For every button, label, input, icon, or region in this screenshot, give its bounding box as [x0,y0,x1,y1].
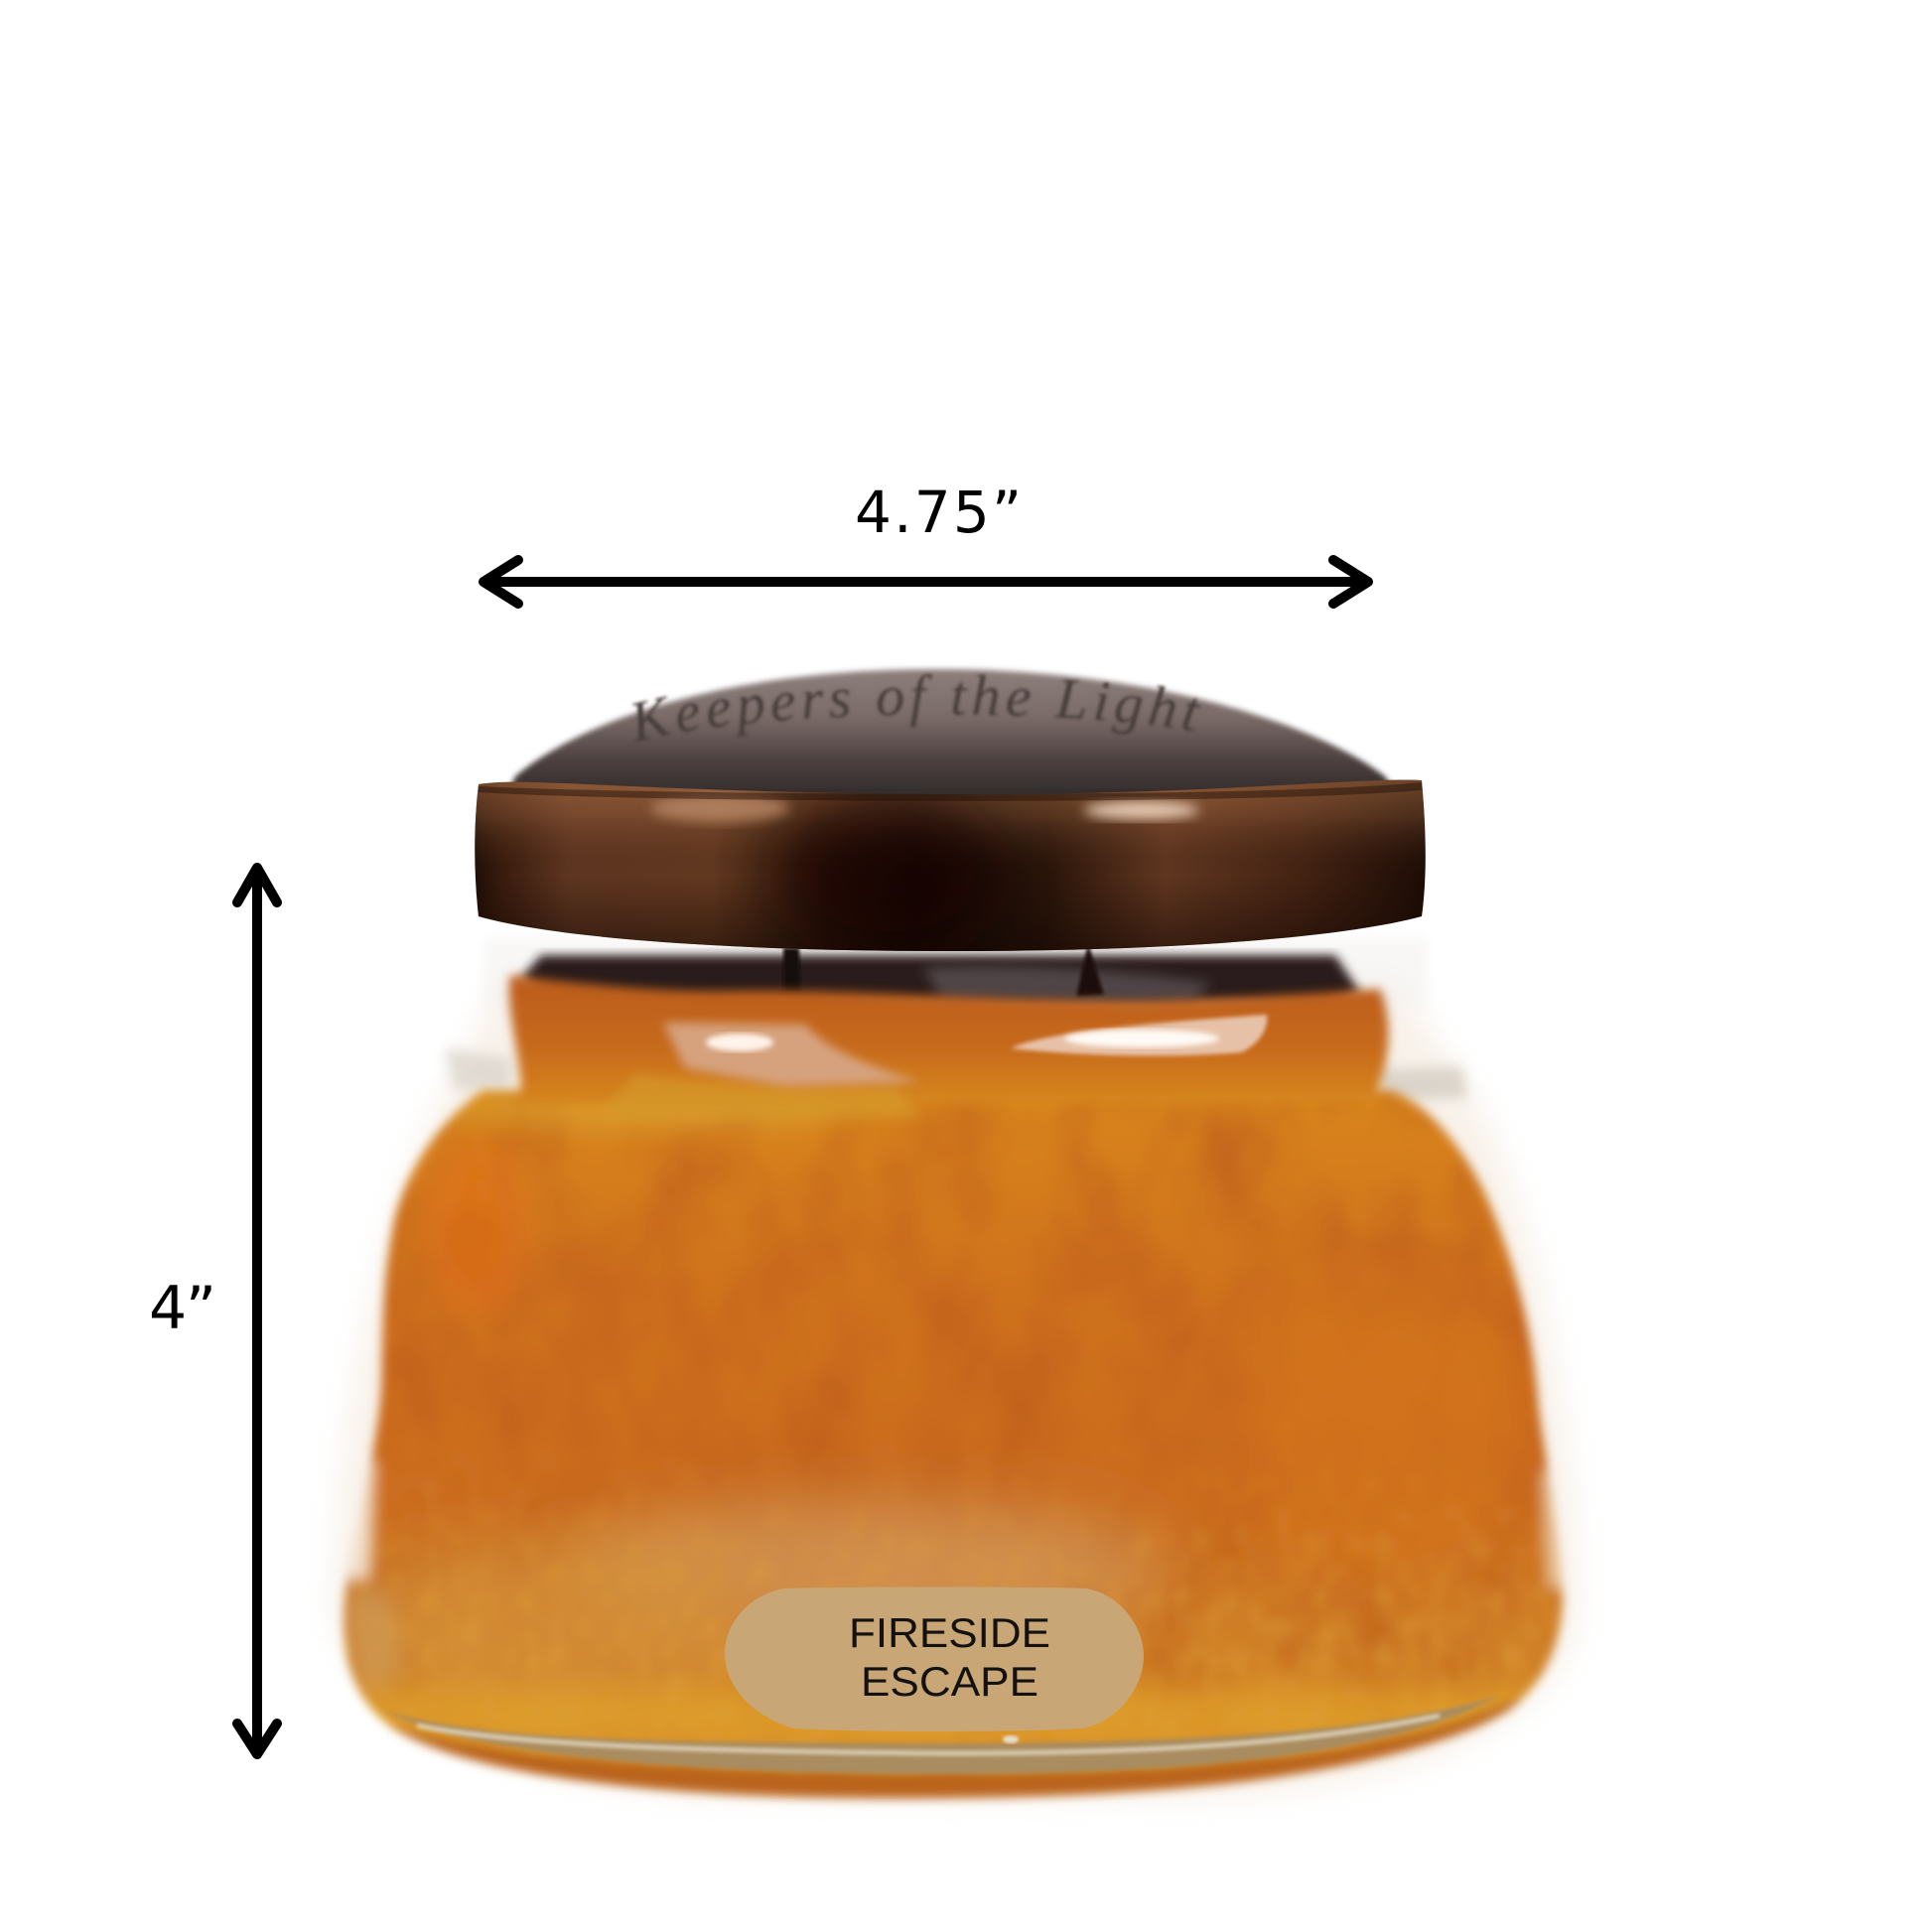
height label: 4” [149,1274,216,1343]
white glint left [706,1034,773,1051]
lid band [472,774,1435,958]
dark wick cavity [521,943,1360,1005]
lid dome [501,669,1405,806]
infographic: jar with dimensions [151,490,1584,1809]
yellow shoulder glow [407,1085,864,1129]
lid [475,665,1426,951]
pale right glass edge [1541,1469,1569,1588]
wick right [1076,943,1104,997]
base wax under rim [395,1696,1520,1803]
white glint right [1064,1030,1219,1047]
glass neck above wax [445,938,1467,1100]
scent label [725,1587,1144,1731]
height arrow [237,868,277,1754]
orange glow on left [443,1185,509,1296]
glass rim highlight right [1011,1015,1267,1055]
bottom glass rim [382,1696,1499,1774]
pale left glass edge [338,1459,375,1581]
right warm glow [1244,1405,1465,1531]
speckled lower texture [425,1533,1545,1682]
wax body [318,1072,1598,1817]
width label: 4.75” [855,479,1022,546]
engraved script on lid: Keepers of the Light [630,672,1201,743]
candle jar [330,665,1584,1809]
width arrow [483,560,1368,604]
neck yellow glow [596,1074,923,1120]
glass rim highlight left [663,1023,921,1086]
lighter lower wax [566,1499,1162,1638]
label text: FIRESIDE [849,1609,1050,1656]
scent label: ESCAPE [861,1658,1038,1705]
wick left [783,948,800,993]
glass halo around jar [333,978,1581,1799]
wax neck [509,975,1388,1104]
